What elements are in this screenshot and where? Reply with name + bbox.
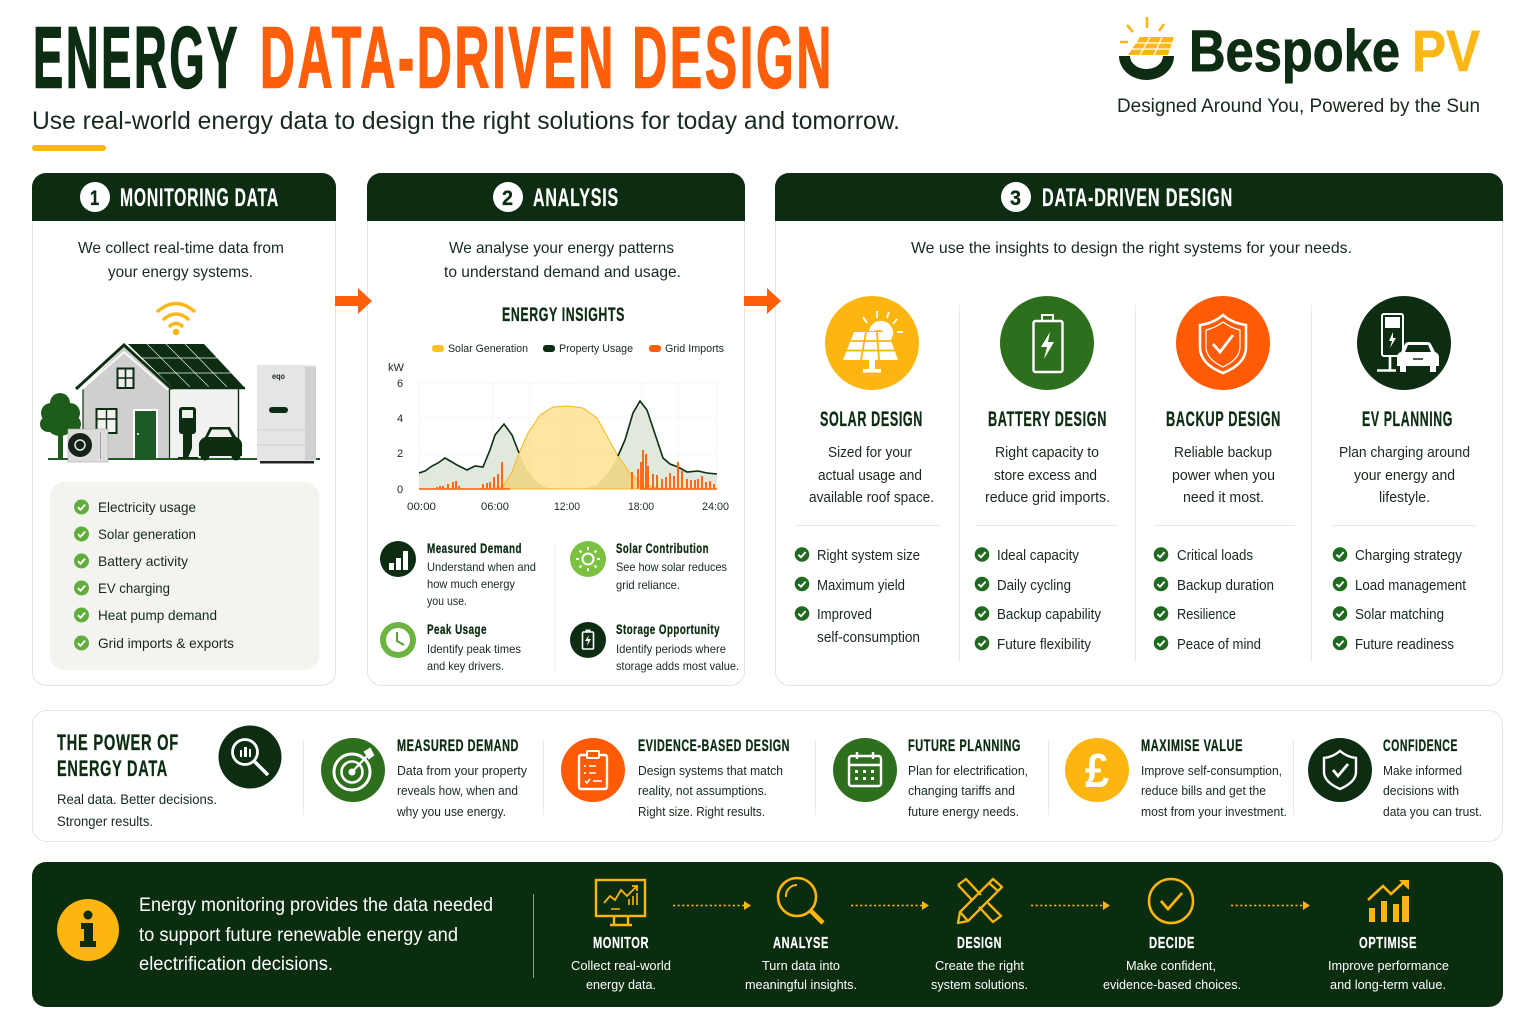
column: EV planning — [1333, 296, 1475, 653]
intro text: We use the insights to design the right systems for your needs. — [911, 240, 1352, 257]
insight: measured demand — [380, 541, 536, 608]
insight: storage opportunity: storage adds most value. — [616, 659, 739, 673]
checklist: Improved — [817, 607, 872, 623]
insight: peak usage: Identify peak times — [427, 642, 521, 656]
checklist: Future readiness — [1355, 637, 1454, 653]
icon: shield with tick — [1176, 296, 1270, 390]
icon: growth chart — [1368, 880, 1409, 922]
icon: monitor with chart — [596, 880, 645, 925]
column: backup design: need it most. — [1183, 490, 1264, 506]
panel: process band — [32, 862, 1503, 1007]
step: decide: DECIDE — [1149, 935, 1195, 952]
insight: measured demand: you use. — [427, 594, 467, 608]
checklist: Daily cycling — [997, 578, 1071, 594]
checklist: Critical loads — [1177, 548, 1253, 564]
checklist: Future flexibility — [997, 637, 1092, 653]
axis labels — [388, 362, 729, 513]
benefit: maximise value: MAXIMISE VALUE — [1141, 737, 1243, 755]
checklist: monitored data sources: EV charging — [98, 580, 170, 596]
illustration: house with solar, heat pump, EV and battery — [40, 344, 320, 464]
icon: calendar — [833, 738, 897, 802]
benefit: maximise value: £ — [1085, 745, 1109, 798]
benefit: future planning: future energy needs. — [908, 804, 1019, 819]
insight: storage opportunity: Identify periods where — [616, 642, 726, 656]
panel heading — [1001, 182, 1233, 212]
step: decide: Make confident, — [1126, 958, 1216, 973]
panel heading: MONITORING DATA — [120, 184, 279, 212]
chart legend: Grid Imports — [665, 343, 724, 355]
area chart: energy by time of day — [388, 362, 729, 513]
benefit: measured demand: MEASURED DEMAND — [397, 737, 519, 755]
step: optimise: and long-term value. — [1330, 977, 1446, 992]
column: battery design — [975, 296, 1118, 653]
chart legend — [432, 343, 724, 355]
axis labels: 24:00 — [702, 501, 729, 513]
arrow: dotted — [673, 901, 751, 910]
panel: the power of energy data — [32, 710, 1502, 842]
benefit: future planning: FUTURE PLANNING — [908, 737, 1021, 755]
column: battery design: BATTERY DESIGN — [988, 408, 1107, 431]
benefit: confidence: Make informed — [1383, 763, 1462, 778]
checklist: monitored data sources: Solar generation — [98, 526, 196, 542]
checklist: Right system size — [817, 548, 920, 564]
chart legend: Property Usage — [559, 343, 633, 355]
checklist: Maximum yield — [817, 578, 905, 594]
step: decide: evidence-based choices. — [1103, 977, 1241, 992]
subtitle: Use real-world energy data to design the right solutions for today and tomorrow. — [32, 107, 900, 135]
title — [33, 10, 834, 106]
benefit: future planning — [833, 737, 1028, 819]
benefit: evidence-based design: Design systems that match — [638, 763, 783, 778]
checklist: Backup capability — [997, 607, 1102, 623]
checklist: Charging strategy — [1355, 548, 1463, 564]
checklist: Load management — [1355, 578, 1466, 594]
benefit: maximise value — [1065, 737, 1287, 819]
tree — [40, 393, 81, 459]
step: design: Create the right — [935, 958, 1024, 973]
panel heading: 2 — [502, 187, 514, 210]
benefit: measured demand: reveals how, when and — [397, 783, 518, 798]
column: EV planning: Plan charging around — [1339, 445, 1470, 461]
benefit: evidence-based design: EVIDENCE-BASED DESIGN — [638, 737, 790, 755]
benefit: evidence-based design: reality, not assumptions. — [638, 783, 767, 798]
axis labels: 2 — [397, 448, 403, 460]
axis labels: 18:00 — [628, 501, 654, 513]
section intro — [57, 726, 282, 829]
checklist: Peace of mind — [1177, 637, 1261, 653]
icon: battery — [1000, 296, 1094, 390]
panel heading: 1 — [90, 187, 100, 210]
insight: measured demand: Measured Demand — [427, 541, 522, 556]
intro text: to understand demand and usage. — [444, 264, 681, 281]
step: design: DESIGN — [957, 935, 1002, 952]
callout text — [139, 894, 493, 975]
panel heading: ANALYSIS — [533, 184, 619, 212]
axis labels: 6 — [397, 378, 403, 390]
intro text: We analyse your energy patterns — [449, 240, 674, 257]
section intro: Stronger results. — [57, 814, 153, 829]
icon: target — [321, 738, 385, 802]
benefit: measured demand — [321, 737, 527, 819]
benefit: confidence: CONFIDENCE — [1383, 737, 1458, 755]
column: backup design: power when you — [1172, 468, 1275, 484]
chart legend: Solar Generation — [448, 343, 528, 355]
step: design — [931, 879, 1028, 992]
intro text — [444, 240, 681, 281]
benefit: confidence: decisions with — [1383, 783, 1459, 798]
step: optimise: Improve performance — [1328, 958, 1449, 973]
intro text: your energy systems. — [108, 264, 253, 281]
step: decide — [1103, 879, 1241, 992]
panel heading: DATA-DRIVEN DESIGN — [1042, 184, 1233, 212]
chart heading: ENERGY INSIGHTS — [502, 305, 625, 326]
column: EV planning: EV PLANNING — [1362, 408, 1453, 431]
step: analyse: ANALYSE — [773, 935, 829, 952]
callout text: Energy monitoring provides the data needed — [139, 894, 493, 916]
column: solar design: available roof space. — [809, 490, 934, 506]
icon: wifi signal — [158, 304, 194, 335]
insight: peak usage: Peak Usage — [427, 622, 487, 637]
insight: measured demand: Understand when and — [427, 560, 536, 574]
insight: measured demand: how much energy — [427, 577, 515, 591]
icon: magnifier — [218, 726, 282, 788]
step: analyse: Turn data into — [762, 958, 840, 973]
checklist: Resilience — [1177, 607, 1236, 623]
column: solar design: Sized for your — [828, 445, 912, 461]
icon: ruler and pencil — [958, 879, 1002, 923]
icon: solar panel and sun — [825, 296, 919, 390]
insight: solar contribution: Solar Contribution — [616, 541, 709, 556]
axis labels: 0 — [397, 484, 403, 496]
step: design: system solutions. — [931, 977, 1028, 992]
arrow: dotted — [1031, 901, 1110, 910]
callout text: electrification decisions. — [139, 953, 333, 975]
step: analyse: meaningful insights. — [745, 977, 857, 992]
panel heading — [493, 182, 619, 212]
checklist — [975, 547, 1102, 653]
checklist: monitored data sources: Battery activity — [98, 553, 188, 569]
checklist: monitored data sources — [50, 482, 319, 670]
arrow: dotted — [1231, 901, 1310, 910]
column: battery design: store excess and — [994, 468, 1097, 484]
benefit: maximise value: Improve self-consumption, — [1141, 763, 1282, 778]
callout text: to support future renewable energy and — [139, 924, 458, 946]
checklist: Ideal capacity — [997, 548, 1080, 564]
logo — [1117, 17, 1480, 117]
panel: monitoring data — [32, 173, 336, 686]
step: optimise — [1328, 880, 1449, 992]
car — [199, 427, 242, 460]
column: EV planning: lifestyle. — [1379, 490, 1430, 506]
arrow: monitoring to analysis — [335, 288, 372, 314]
section intro: ENERGY DATA — [57, 756, 168, 781]
panel heading: 3 — [1010, 187, 1022, 210]
axis labels: kW — [388, 362, 405, 374]
insight: solar contribution: grid reliance. — [616, 578, 680, 592]
column: solar design: actual usage and — [818, 468, 922, 484]
section intro: Real data. Better decisions. — [57, 792, 217, 807]
insight: solar contribution — [570, 541, 727, 592]
logo: Bespoke — [1189, 19, 1400, 84]
arrow: dotted — [851, 901, 929, 910]
column: battery design: reduce grid imports. — [985, 490, 1110, 506]
checklist: monitored data sources: Heat pump demand — [98, 607, 217, 623]
column: backup design: BACKUP DESIGN — [1166, 408, 1281, 431]
insight: storage opportunity — [570, 622, 739, 673]
checklist: monitored data sources: Grid imports & exports — [98, 635, 234, 651]
axis labels: 06:00 — [481, 501, 509, 513]
checklist — [1154, 547, 1274, 653]
icon: magnifier — [778, 878, 823, 923]
step: analyse — [745, 878, 857, 992]
step: optimise: OPTIMISE — [1359, 935, 1417, 952]
benefit: measured demand: Data from your property — [397, 763, 527, 778]
step: monitor — [571, 880, 671, 992]
insight: solar contribution: See how solar reduces — [616, 560, 727, 574]
benefit: future planning: changing tariffs and — [908, 783, 1015, 798]
arrow: analysis to design — [744, 288, 781, 314]
axis labels: 4 — [397, 413, 403, 425]
intro text: We collect real-time data from — [78, 240, 284, 257]
column: backup design: Reliable backup — [1174, 445, 1272, 461]
icon: clipboard — [561, 738, 625, 802]
benefit: confidence — [1308, 737, 1482, 819]
checklist — [1333, 547, 1466, 653]
logo: Designed Around You, Powered by the Sun — [1117, 96, 1480, 117]
insight: peak usage: and key drivers. — [427, 659, 504, 673]
checklist: monitored data sources: Electricity usage — [98, 499, 196, 515]
step: monitor: energy data. — [586, 977, 656, 992]
insight: storage opportunity: Storage Opportunity — [616, 622, 720, 637]
step: monitor: Collect real-world — [571, 958, 671, 973]
panel: analysis — [367, 173, 745, 686]
column: EV planning: your energy and — [1354, 468, 1455, 484]
icon: circled tick — [1149, 879, 1193, 923]
benefit: measured demand: why you use energy. — [396, 804, 506, 819]
benefit: evidence-based design: Right size. Right results. — [638, 804, 765, 819]
benefit: confidence: data you can trust. — [1383, 804, 1482, 819]
checklist: Solar matching — [1355, 607, 1444, 623]
icon: information — [57, 899, 119, 961]
intro text — [78, 240, 284, 281]
benefit: maximise value: most from your investment. — [1141, 804, 1287, 819]
section intro: THE POWER OF — [57, 730, 179, 755]
icon: EV charger and car — [1357, 296, 1451, 390]
icon: shield — [1308, 738, 1372, 802]
logo: PV — [1412, 19, 1480, 84]
column: battery design: Right capacity to — [995, 445, 1099, 461]
title: ENERGY — [33, 10, 240, 106]
checklist: self-consumption — [817, 630, 920, 646]
benefit: future planning: Plan for electrification, — [908, 763, 1028, 778]
title: DATA-DRIVEN DESIGN — [260, 10, 834, 106]
benefit: maximise value: reduce bills and get the — [1141, 783, 1266, 798]
axis labels: 12:00 — [554, 501, 580, 513]
insight: peak usage — [380, 622, 521, 673]
battery storage cabinet — [257, 365, 316, 464]
panel heading — [80, 182, 279, 212]
rooftop solar panels — [128, 344, 245, 388]
panel: data-driven design — [775, 173, 1503, 686]
step: monitor: MONITOR — [593, 935, 649, 952]
checklist — [795, 547, 920, 646]
heat pump — [68, 429, 108, 462]
column: backup design — [1154, 296, 1295, 653]
icon: logo sun panel — [1119, 17, 1174, 80]
EV charger — [178, 407, 198, 458]
benefit: evidence-based design — [561, 737, 790, 819]
battery storage cabinet: eqo — [272, 372, 285, 381]
axis labels: 00:00 — [407, 501, 436, 513]
column: solar design — [795, 296, 941, 646]
checklist: Backup duration — [1177, 578, 1274, 594]
column: solar design: SOLAR DESIGN — [820, 408, 923, 431]
